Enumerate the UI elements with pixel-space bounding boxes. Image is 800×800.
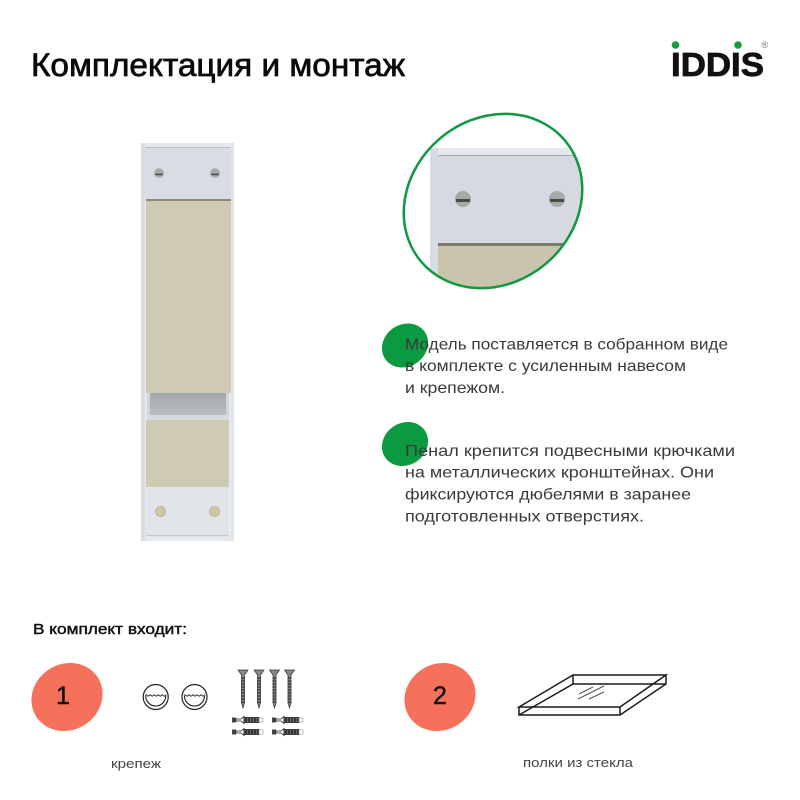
- title: Комплектация и монтаж: [31, 47, 406, 83]
- text block 2 with green marker: подготовленных отверстиях.: [405, 508, 644, 526]
- icon: screws: [238, 670, 294, 708]
- icon: dowels: [232, 716, 303, 736]
- badge 1: 1: [56, 682, 70, 710]
- badge 2: 2: [433, 682, 447, 710]
- bottom mounting panel: [146, 487, 229, 537]
- icon: glass shelf: [519, 675, 666, 715]
- text block 2 with green marker: [373, 413, 735, 526]
- top mounting panel: [145, 147, 231, 199]
- text block 1 with green marker: Модель поставляется в собранном виде: [405, 336, 728, 354]
- logo: IDDIS: IDDIS: [671, 46, 764, 83]
- text block 2 with green marker: на металлических кронштейнах. Они: [405, 464, 714, 482]
- niche: [147, 393, 229, 420]
- caption: glass shelves: полки из стекла: [523, 755, 634, 770]
- text block 1 with green marker: [373, 315, 728, 397]
- caption: fasteners: крепеж: [111, 756, 161, 771]
- green marker 1: [373, 315, 437, 376]
- text block 1 with green marker: и крепежом.: [405, 380, 505, 397]
- kit heading: В комплект входит:: [33, 621, 187, 638]
- text block 2 with green marker: Пенал крепится подвесными крючками: [405, 443, 735, 460]
- lower beige back panel: [146, 420, 229, 487]
- upper beige back panel: [146, 199, 231, 393]
- text block 1 with green marker: в комплекте с усиленным навесом: [405, 358, 686, 375]
- icon: washers: [143, 684, 207, 710]
- text block 2 with green marker: фиксируются дюбелями в заранее: [405, 486, 691, 504]
- badge 2: [392, 650, 488, 744]
- detail lens: hanging bracket close-up: [402, 112, 584, 290]
- logo: IDDIS: ®: [762, 40, 768, 50]
- badge 1: [19, 650, 115, 744]
- green marker 2: [373, 413, 437, 475]
- product: wall cabinet back view: [141, 143, 234, 541]
